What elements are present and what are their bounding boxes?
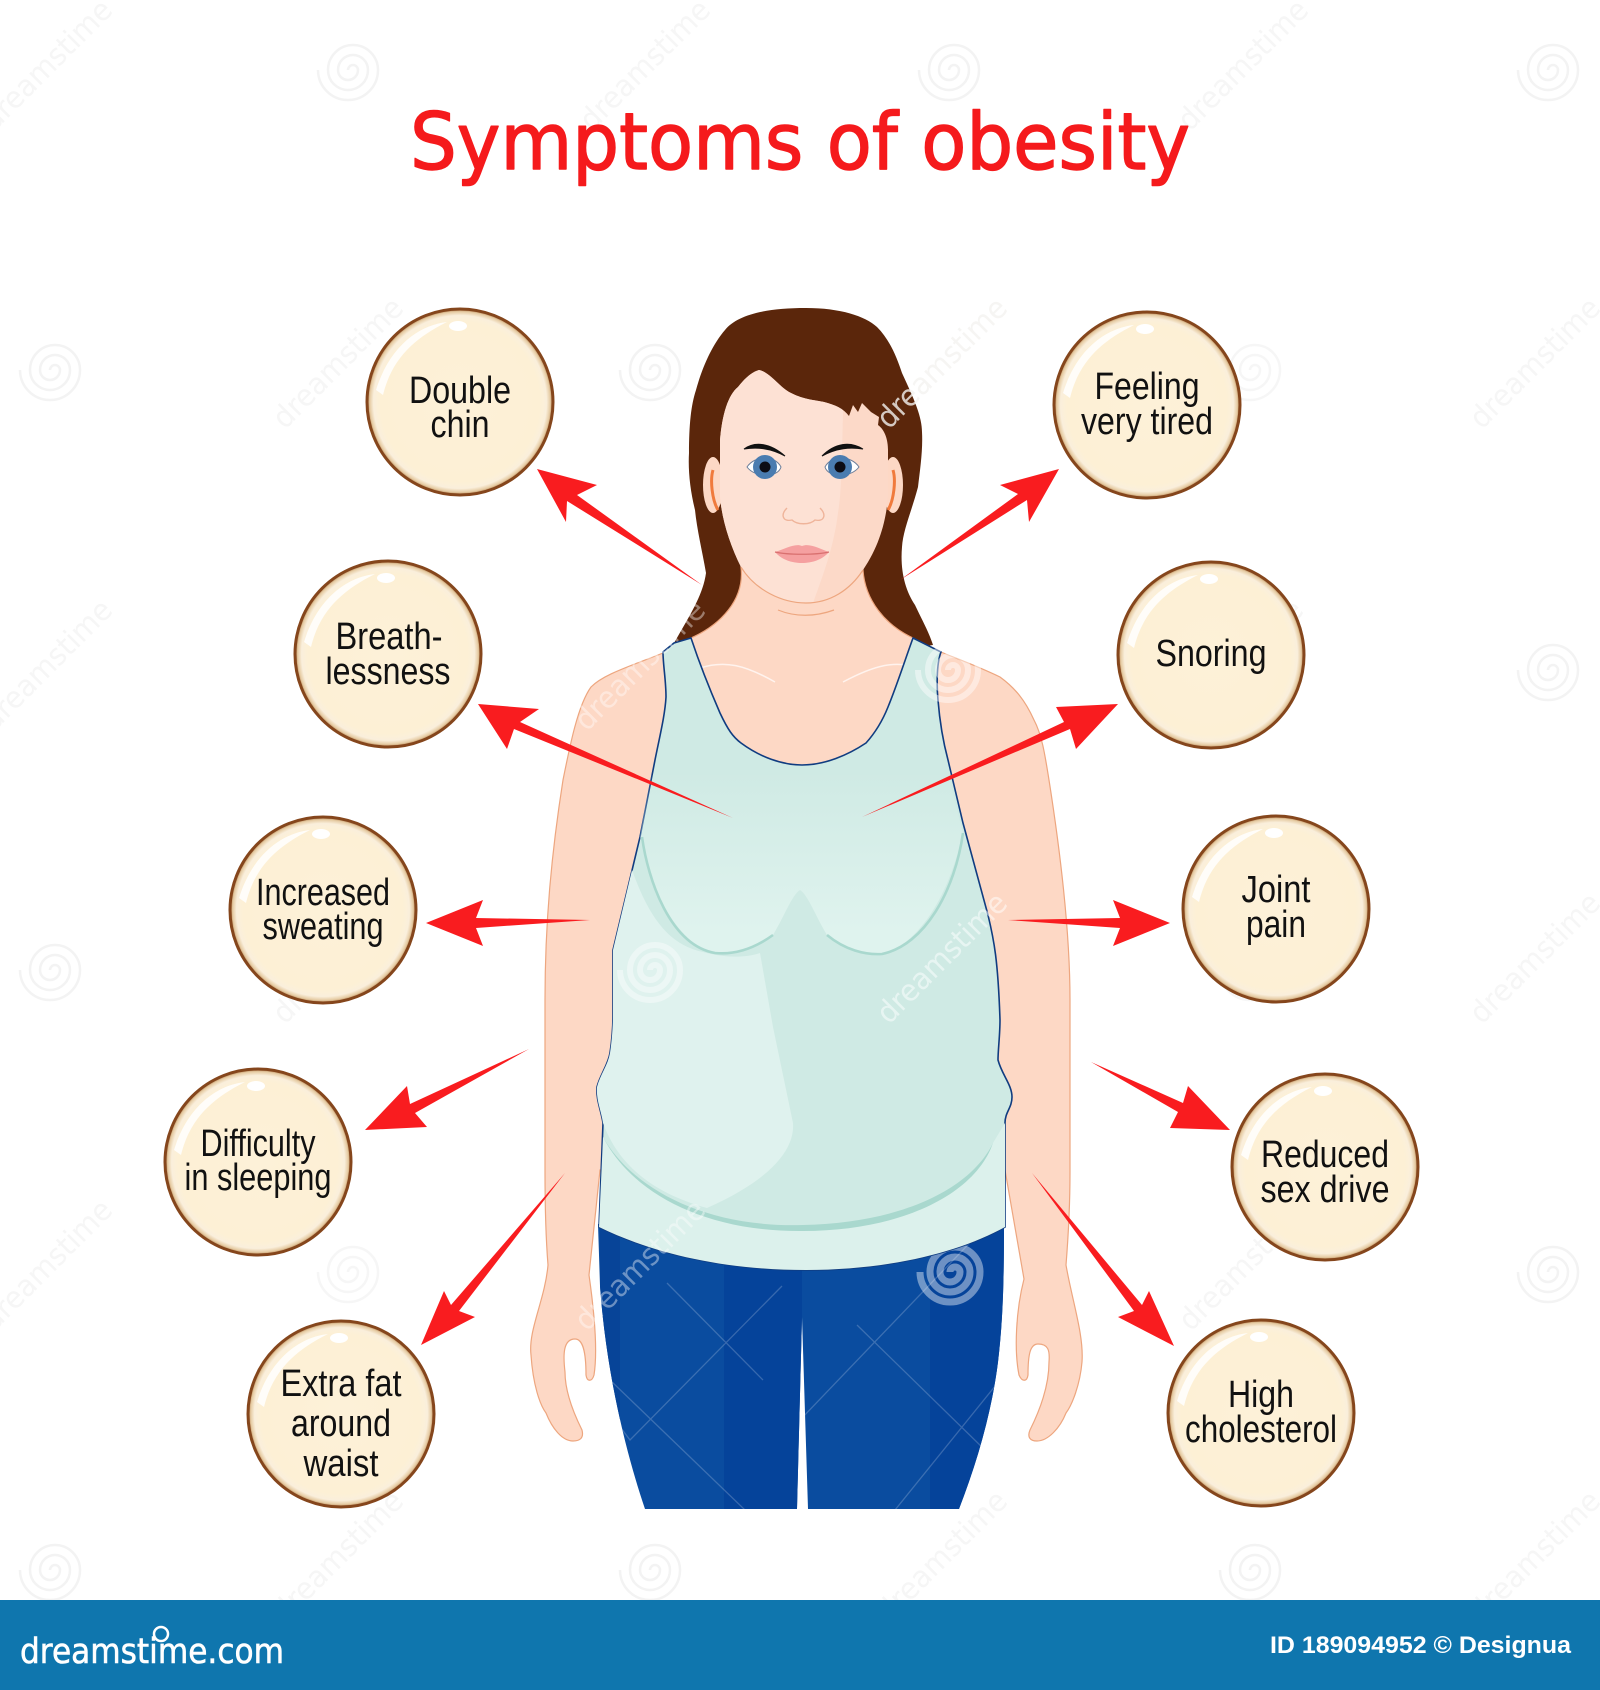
bubble: feeling very tired: Feeling [1094,366,1200,408]
footer logo: dreamstime.com [20,1632,284,1672]
arrow: high cholesterol [1032,1173,1174,1346]
bust lines [642,833,963,954]
bubble: snoring [1118,562,1304,748]
bubble: feeling very tired: very tired [1081,401,1213,443]
bubble: snoring: Snoring [1156,633,1266,675]
jeans [598,1224,1004,1509]
face [720,370,888,602]
arrow: increased sweating [426,900,590,946]
woman figure [531,308,1082,1510]
watermark text on white: dreamstime [266,886,411,1031]
shirt hem fold [603,1137,993,1231]
watermark text on white: dreamstime [266,291,411,436]
watermark text on white: dreamstime [1166,593,1311,738]
watermark text on figure [568,291,1015,1338]
bubble: double chin: Double [409,370,511,412]
watermark spiral on shirt [620,945,680,1000]
arrows [365,469,1230,1346]
bubble: double chin [367,309,553,495]
arrow: extra fat around waist [421,1173,565,1345]
arrow: double chin [537,469,702,585]
watermark text on figure: dreamstime [568,1193,713,1338]
watermark text on figure: dreamstime [568,593,713,738]
nose [783,508,824,524]
bubble: increased sweating [230,817,416,1003]
bubble: breathlessness [295,561,481,747]
chest highlight [640,775,963,954]
watermark text on white: dreamstime [870,1484,1015,1629]
bubble: high cholesterol: High [1228,1374,1294,1416]
bubble: reduced sex drive [1232,1074,1418,1260]
bubble: difficulty in sleeping: Difficulty [200,1123,316,1165]
right eye [825,455,859,479]
skin: neck, shoulders and arms [531,567,1082,1441]
bubble: joint pain: pain [1246,904,1306,946]
watermark spiral on jeans [920,1247,980,1302]
bubble: extra fat around waist: waist [303,1443,379,1485]
bubble: high cholesterol: cholesterol [1185,1409,1337,1451]
bubble: reduced sex drive: Reduced [1261,1134,1389,1176]
bubble: joint pain: Joint [1242,869,1311,911]
watermark text on white: dreamstime [266,1484,411,1629]
left eye [747,455,781,479]
bubble: reduced sex drive: sex drive [1260,1169,1390,1211]
watermark text on figure: dreamstime [870,291,1015,436]
footer logo spiral [154,1627,168,1641]
bubble: increased sweating: sweating [262,906,384,948]
lower shirt highlight [597,870,793,1208]
arrow: feeling very tired [900,469,1059,580]
bubble: difficulty in sleeping [165,1069,351,1255]
watermark text on figure: dreamstime [870,886,1015,1031]
tank top [597,638,1012,1270]
bubble: extra fat around waist: Extra fat [280,1363,402,1405]
bubble: breathlessness: lessness [326,651,450,693]
arrow: difficulty in sleeping [365,1049,529,1130]
image id: ID 189094952 © Designua [1270,1632,1572,1659]
watermark spiral on shoulder [918,645,978,700]
hair [674,308,933,650]
lips [775,545,829,563]
title: Symptoms of obesity [410,98,1190,188]
watermark text on white: dreamstime [1172,1193,1317,1338]
bubble: increased sweating: Increased [256,872,390,914]
arrow: snoring [862,704,1118,817]
arrow: reduced sex drive [1091,1062,1230,1130]
bubble: difficulty in sleeping: in sleeping [184,1157,332,1199]
bubble: extra fat around waist: around [291,1403,391,1445]
watermark spirals over bubbles [318,345,1280,1302]
footer bar [0,1600,1600,1690]
bubble: feeling very tired [1054,312,1240,498]
bubble: breathlessness: Breath- [336,616,442,658]
eyebrows [744,444,863,456]
bubble: extra fat around waist [248,1321,434,1507]
bubble: double chin: chin [430,404,490,446]
arrow: joint pain [1008,900,1170,946]
shirt hem band [599,1123,1005,1270]
bubble: joint pain [1183,816,1369,1002]
bubble: high cholesterol [1168,1320,1354,1506]
collarbones [700,664,920,682]
arrow: breathlessness [478,704,733,818]
ears [703,457,723,513]
